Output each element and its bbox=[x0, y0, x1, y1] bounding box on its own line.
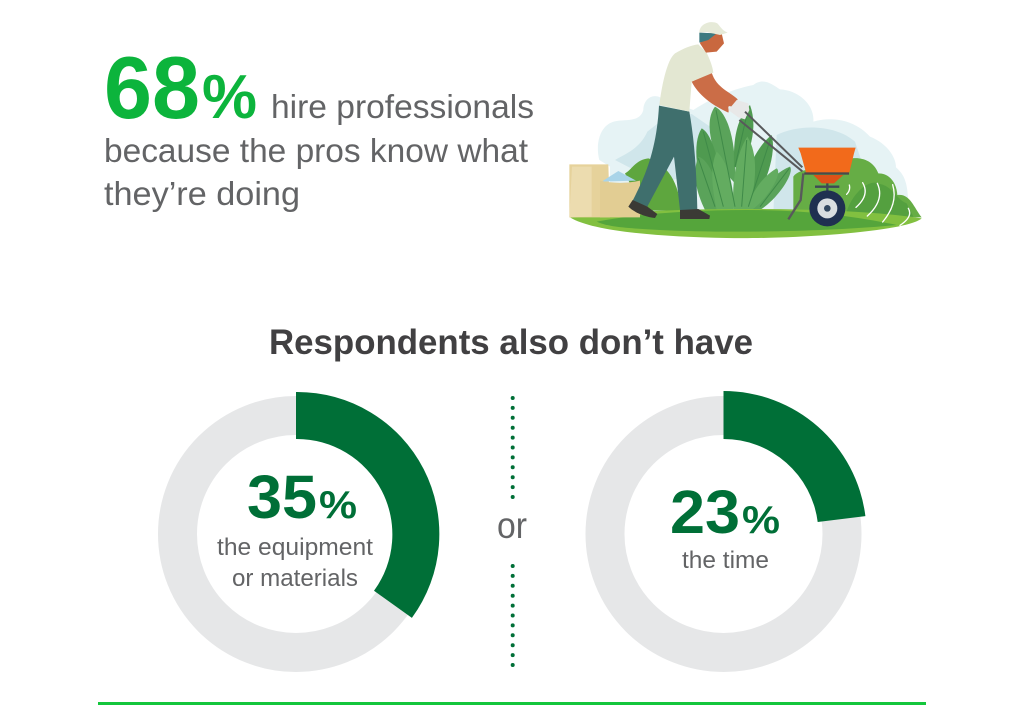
headline: 68% hire professionals: 68 bbox=[104, 38, 200, 137]
label: the time: the time bbox=[682, 547, 769, 574]
value: 35% bbox=[247, 463, 357, 531]
value: 23% bbox=[670, 478, 780, 546]
pale background foliage bbox=[598, 81, 908, 213]
dotted separator with or: or bbox=[497, 505, 527, 546]
label: the equipment or materials bbox=[217, 534, 373, 592]
ground bbox=[570, 209, 922, 238]
value: 35%: % bbox=[319, 484, 357, 527]
spray arcs bbox=[847, 183, 910, 225]
man bbox=[628, 22, 749, 219]
right hedge bbox=[793, 158, 922, 217]
headline: 68% hire professionals: hire professionals bbox=[271, 88, 534, 125]
value: 23%: % bbox=[742, 499, 780, 542]
value: 35%: 35 bbox=[247, 463, 317, 531]
donut chart: 23% bbox=[605, 391, 865, 652]
donut chart: 35% bbox=[178, 392, 439, 652]
illustration: man pushing fertilizer spreader bbox=[569, 22, 922, 238]
sacks bbox=[569, 164, 640, 217]
left hedge bbox=[625, 158, 681, 211]
spreader bbox=[739, 112, 856, 226]
label: the equipment or materials: or materials bbox=[232, 565, 358, 592]
headline: 68% hire professionals bbox=[104, 38, 534, 212]
value: 23%: 23 bbox=[670, 478, 740, 546]
label: the equipment or materials: the equipment bbox=[217, 534, 373, 561]
headline: 68% hire professionals: because the pros know what bbox=[104, 132, 528, 169]
headline: 68% hire professionals: % bbox=[202, 63, 257, 132]
footer rule bbox=[98, 702, 926, 705]
headline: 68% hire professionals: they’re doing bbox=[104, 175, 300, 212]
heading: Respondents also don’t have bbox=[269, 323, 753, 362]
plant leaves bbox=[695, 105, 791, 210]
